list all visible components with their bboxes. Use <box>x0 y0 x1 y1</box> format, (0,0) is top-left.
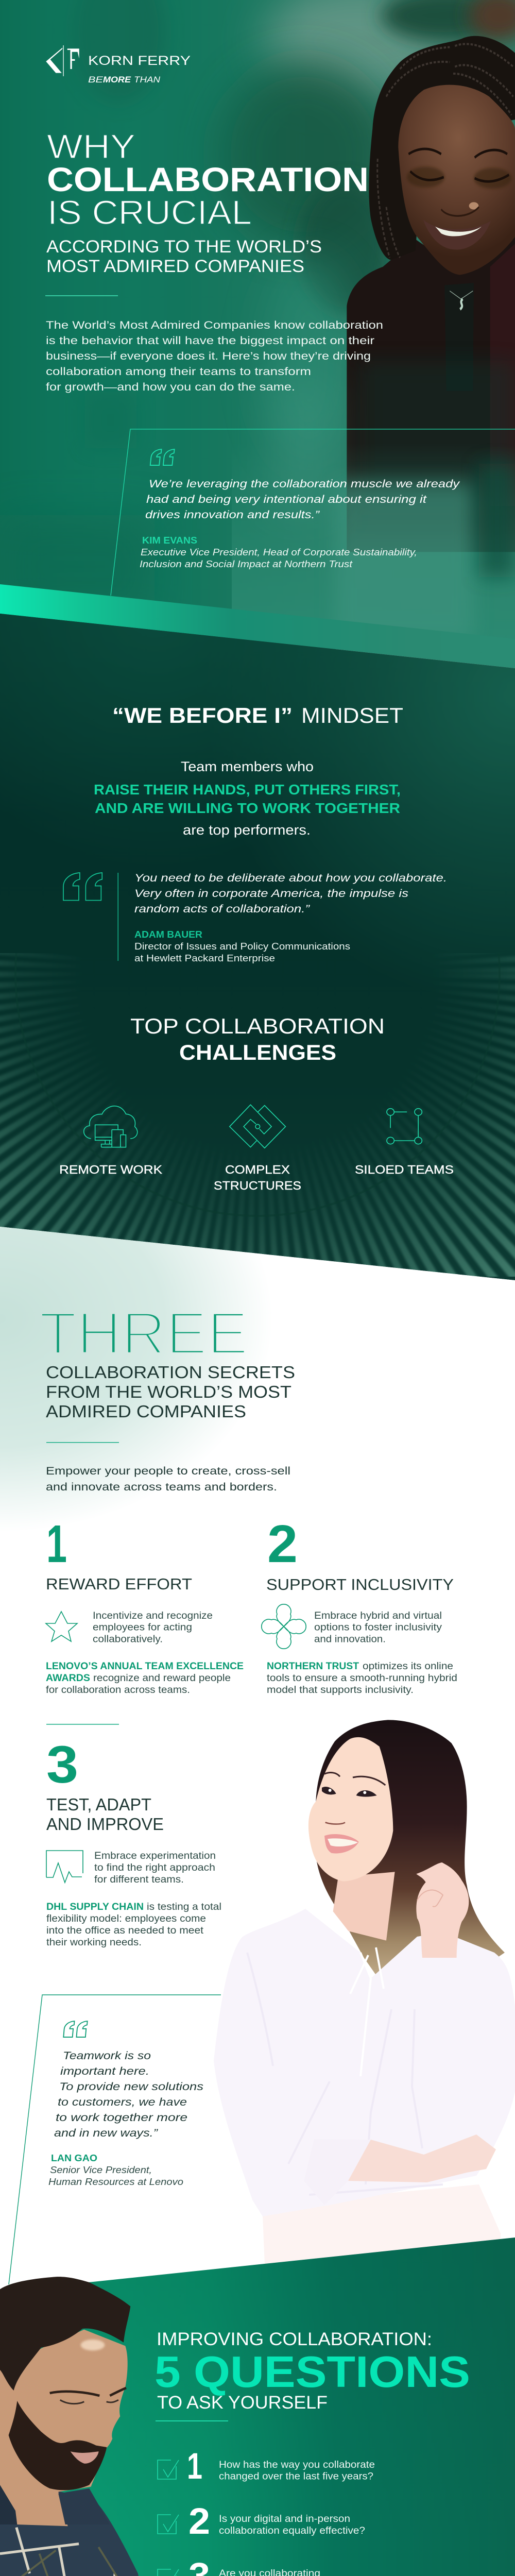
icon: pulse chart <box>46 1851 83 1883</box>
question 1: changed over the last five years? <box>219 2471 373 2482</box>
secret 1: reward effort: for collaboration across teams. <box>46 1685 190 1696</box>
secret 1: reward effort: employees for acting <box>93 1622 192 1633</box>
secret 2: support inclusivity: tools to ensure a smooth-running hybrid <box>267 1673 457 1684</box>
statement: top performers: Team members who <box>181 759 314 774</box>
hero photo background <box>0 0 515 644</box>
logo: Korn Ferry <box>46 45 191 84</box>
intro paragraph <box>46 319 383 393</box>
icon: interlocked diamonds <box>230 1105 285 1148</box>
logo: Korn Ferry: MORE <box>103 75 131 84</box>
logo: Korn Ferry: KORN FERRY <box>88 54 191 68</box>
title <box>46 127 369 276</box>
title: IS CRUCIAL <box>47 193 252 231</box>
panel: three collaboration secrets <box>0 1227 515 2284</box>
callout: Adam Bauer quote: ADAM BAUER <box>134 929 202 940</box>
question 1 <box>158 2446 375 2487</box>
secret 3: test, adapt and improve: DHL SUPPLY CHAIN <box>46 1902 144 1912</box>
callout: Lan Gao quote: Human Resources at Lenovo <box>48 2176 183 2187</box>
intro paragraph: collaboration among their teams to transform <box>46 366 311 378</box>
callout: Adam Bauer quote: Director of Issues and Policy Communications <box>134 941 350 952</box>
secret 1: reward effort: recognize and reward people <box>93 1673 231 1684</box>
shirt and trousers <box>214 1909 515 2277</box>
challenge: complex structures: STRUCTURES <box>214 1179 301 1192</box>
callout: Lan Gao quote: To provide new solutions <box>59 2080 203 2093</box>
secret 1: reward effort: Incentivize and recognize <box>93 1611 213 1621</box>
callout: Adam Bauer quote: You need to be deliberate about how you collaborate. <box>134 872 447 884</box>
icon: checkbox <box>158 2515 179 2534</box>
callout: Adam Bauer quote: Very often in corporate America, the impulse is <box>134 887 408 900</box>
challenge: complex structures <box>214 1105 301 1192</box>
photo: smiling woman <box>347 36 515 552</box>
callout: Lan Gao quote: to work together more <box>56 2111 187 2124</box>
heading: we before I mindset <box>112 703 403 727</box>
panel: hero <box>0 0 515 649</box>
callout: Lan Gao quote: Teamwork is so <box>63 2049 151 2062</box>
secret 2: support inclusivity: Embrace hybrid and virtual <box>314 1611 442 1621</box>
intro paragraph: is the behavior that will have the biggest impact on their <box>46 335 374 347</box>
callout: Lan Gao quote <box>9 1995 221 2284</box>
panel: we before I mindset <box>0 614 515 1280</box>
icon: quote marks <box>150 449 175 465</box>
secret 1: reward effort: LENOVO’S ANNUAL TEAM EXCELLENCE <box>46 1661 244 1672</box>
heading: 5 questions: TO ASK YOURSELF <box>157 2393 328 2413</box>
statement: top performers: RAISE THEIR HANDS, PUT OTHERS FIRST, <box>94 782 401 798</box>
challenge: remote work: REMOTE WORK <box>59 1163 163 1176</box>
secret 3: test, adapt and improve: Embrace experimentation <box>94 1851 216 1861</box>
secret 2: support inclusivity: model that supports inclusivity. <box>267 1685 414 1696</box>
statement: top performers: AND ARE WILLING TO WORK TOGETHER <box>95 800 400 816</box>
icon: clover <box>262 1604 306 1649</box>
challenge: siloed teams <box>355 1109 454 1176</box>
icon: disconnected nodes <box>387 1109 422 1144</box>
heading: three collaboration secrets: FROM THE WORLD’S MOST <box>46 1383 291 1402</box>
heading: top collaboration challenges: CHALLENGES <box>179 1040 336 1064</box>
secret 1: reward effort: AWARDS <box>46 1673 90 1684</box>
dark background with radial fins <box>0 614 515 1280</box>
icon: star <box>46 1612 77 1641</box>
quote: Kim Evans text: KIM EVANS <box>142 535 197 546</box>
heading: three collaboration secrets: COLLABORATION SECRETS <box>46 1363 295 1382</box>
secret 3: test, adapt and improve: AND IMPROVE <box>46 1815 164 1834</box>
question 1: How has the way you collaborate <box>219 2460 375 2470</box>
callout: Lan Gao quote: important here. <box>60 2065 149 2077</box>
question 3 <box>158 2556 351 2576</box>
icon: large quote marks <box>63 873 102 901</box>
hero lower fade <box>0 361 515 649</box>
quote: Kim Evans text <box>140 449 460 569</box>
secret 3: test, adapt and improve: flexibility model: employees come <box>46 1913 206 1924</box>
callout: Adam Bauer quote: random acts of collaboration.” <box>134 903 310 915</box>
secret 3: test, adapt and improve <box>46 1735 221 1948</box>
intro paragraph: for growth—and how you can do the same. <box>46 381 295 393</box>
callout: Adam Bauer quote: at Hewlett Packard Enterprise <box>134 953 275 963</box>
mint background <box>0 1227 515 1546</box>
secret 3: test, adapt and improve: TEST, ADAPT <box>46 1795 151 1814</box>
icon: quote marks <box>63 2021 88 2037</box>
question 2: collaboration equally effective? <box>219 2526 365 2536</box>
question 2 <box>158 2501 365 2542</box>
heading: 5 questions: 5 QUESTIONS <box>154 2348 470 2397</box>
secret 1: reward effort: 1 <box>46 1514 67 1573</box>
title: ACCORDING TO THE WORLD’S <box>46 237 322 257</box>
head <box>0 2277 130 2526</box>
secret 1: reward effort: REWARD EFFORT <box>46 1575 192 1593</box>
face and neck <box>308 1737 395 1941</box>
heading: 5 questions <box>154 2329 470 2413</box>
icon: checkbox <box>158 2569 179 2576</box>
intro text: Empower your people to create, cross-sell <box>46 1465 290 1477</box>
callout: Lan Gao quote: to customers, we have <box>58 2096 187 2108</box>
challenge: complex structures: COMPLEX <box>225 1163 290 1176</box>
secret 3: test, adapt and improve: into the office as needed to meet <box>46 1925 204 1936</box>
logo: Korn Ferry: BE <box>88 75 104 84</box>
statement: top performers <box>94 759 401 838</box>
heading: three collaboration secrets: THREE <box>39 1299 248 1367</box>
hand <box>416 1862 469 1958</box>
hair back <box>316 1720 505 1992</box>
heading: top collaboration challenges: TOP COLLABORATION <box>130 1014 385 1038</box>
photo: man with phone <box>0 2277 261 2576</box>
heading: we before I mindset: MINDSET <box>301 703 403 727</box>
photo: woman looking up <box>214 1720 515 2277</box>
secret 2: support inclusivity: 2 <box>267 1514 298 1573</box>
heading: we before I mindset: “WE BEFORE I” <box>112 703 293 727</box>
challenge: remote work <box>59 1106 163 1176</box>
secret 2: support inclusivity: optimizes its online <box>363 1661 453 1672</box>
secret 3: test, adapt and improve: 3 <box>46 1735 78 1794</box>
intro paragraph: business—if everyone does it. Here’s how they’re driving <box>46 350 371 362</box>
secret 3: test, adapt and improve: their working needs. <box>46 1937 142 1948</box>
secret 3: test, adapt and improve: is testing a total <box>147 1902 221 1912</box>
quote: Kim Evans text: drives innovation and results.” <box>145 509 320 521</box>
question 2: Is your digital and in-person <box>219 2514 350 2524</box>
quote: Kim Evans text: had and being very intentional about ensuring it <box>146 493 427 505</box>
heading: 5 questions: IMPROVING COLLABORATION: <box>157 2329 432 2349</box>
title: MOST ADMIRED COMPANIES <box>46 257 304 276</box>
secret 3: test, adapt and improve: for different teams. <box>94 1874 184 1885</box>
intro text <box>46 1465 290 1493</box>
title: WHY <box>47 127 135 165</box>
callout: Lan Gao quote: and in new ways.” <box>54 2127 158 2139</box>
plaid shirt <box>0 2485 210 2576</box>
intro paragraph: The World’s Most Admired Companies know collaboration <box>46 319 383 331</box>
intro text: and innovate across teams and borders. <box>46 1481 277 1493</box>
callout frame: Kim Evans quote <box>111 429 515 596</box>
secret 2: support inclusivity: and innovation. <box>314 1634 386 1645</box>
secret 1: reward effort: collaboratively. <box>93 1634 163 1645</box>
secret 3: test, adapt and improve: to find the right approach <box>94 1862 215 1873</box>
secret 2: support inclusivity <box>262 1514 457 1696</box>
title: COLLABORATION <box>47 160 369 198</box>
icon: KF monogram <box>46 45 79 76</box>
quote: Kim Evans text: Inclusion and Social Impact at Northern Trust <box>140 558 353 569</box>
heading: three collaboration secrets: ADMIRED COMPANIES <box>46 1402 246 1421</box>
quote: Kim Evans text: We’re leveraging the collaboration muscle we already <box>149 478 460 490</box>
secret 2: support inclusivity: options to foster inclusivity <box>314 1622 442 1633</box>
statement: top performers: are top performers. <box>183 822 311 838</box>
logo: Korn Ferry: THAN <box>134 75 161 84</box>
question 1: 1 <box>187 2446 202 2487</box>
secret 2: support inclusivity: NORTHERN TRUST <box>267 1661 359 1672</box>
secret 2: support inclusivity: SUPPORT INCLUSIVITY <box>266 1575 454 1594</box>
question 2: 2 <box>188 2501 210 2542</box>
green background <box>0 2238 515 2576</box>
secret 1: reward effort <box>46 1514 244 1696</box>
challenge: siloed teams: SILOED TEAMS <box>355 1163 454 1176</box>
accent band <box>0 584 515 668</box>
heading: three collaboration secrets <box>39 1299 295 1421</box>
callout: Lan Gao quote: LAN GAO <box>51 2153 97 2163</box>
callout: Lan Gao quote: Senior Vice President, <box>50 2164 152 2175</box>
panel: five questions <box>0 2238 515 2576</box>
heading: top collaboration challenges <box>130 1014 385 1064</box>
icon: cloud with devices <box>84 1106 138 1147</box>
icon: checkbox <box>158 2460 179 2479</box>
callout: Adam Bauer quote <box>63 872 447 963</box>
quote: Kim Evans text: Executive Vice President, Head of Corporate Sustainability, <box>141 547 417 557</box>
